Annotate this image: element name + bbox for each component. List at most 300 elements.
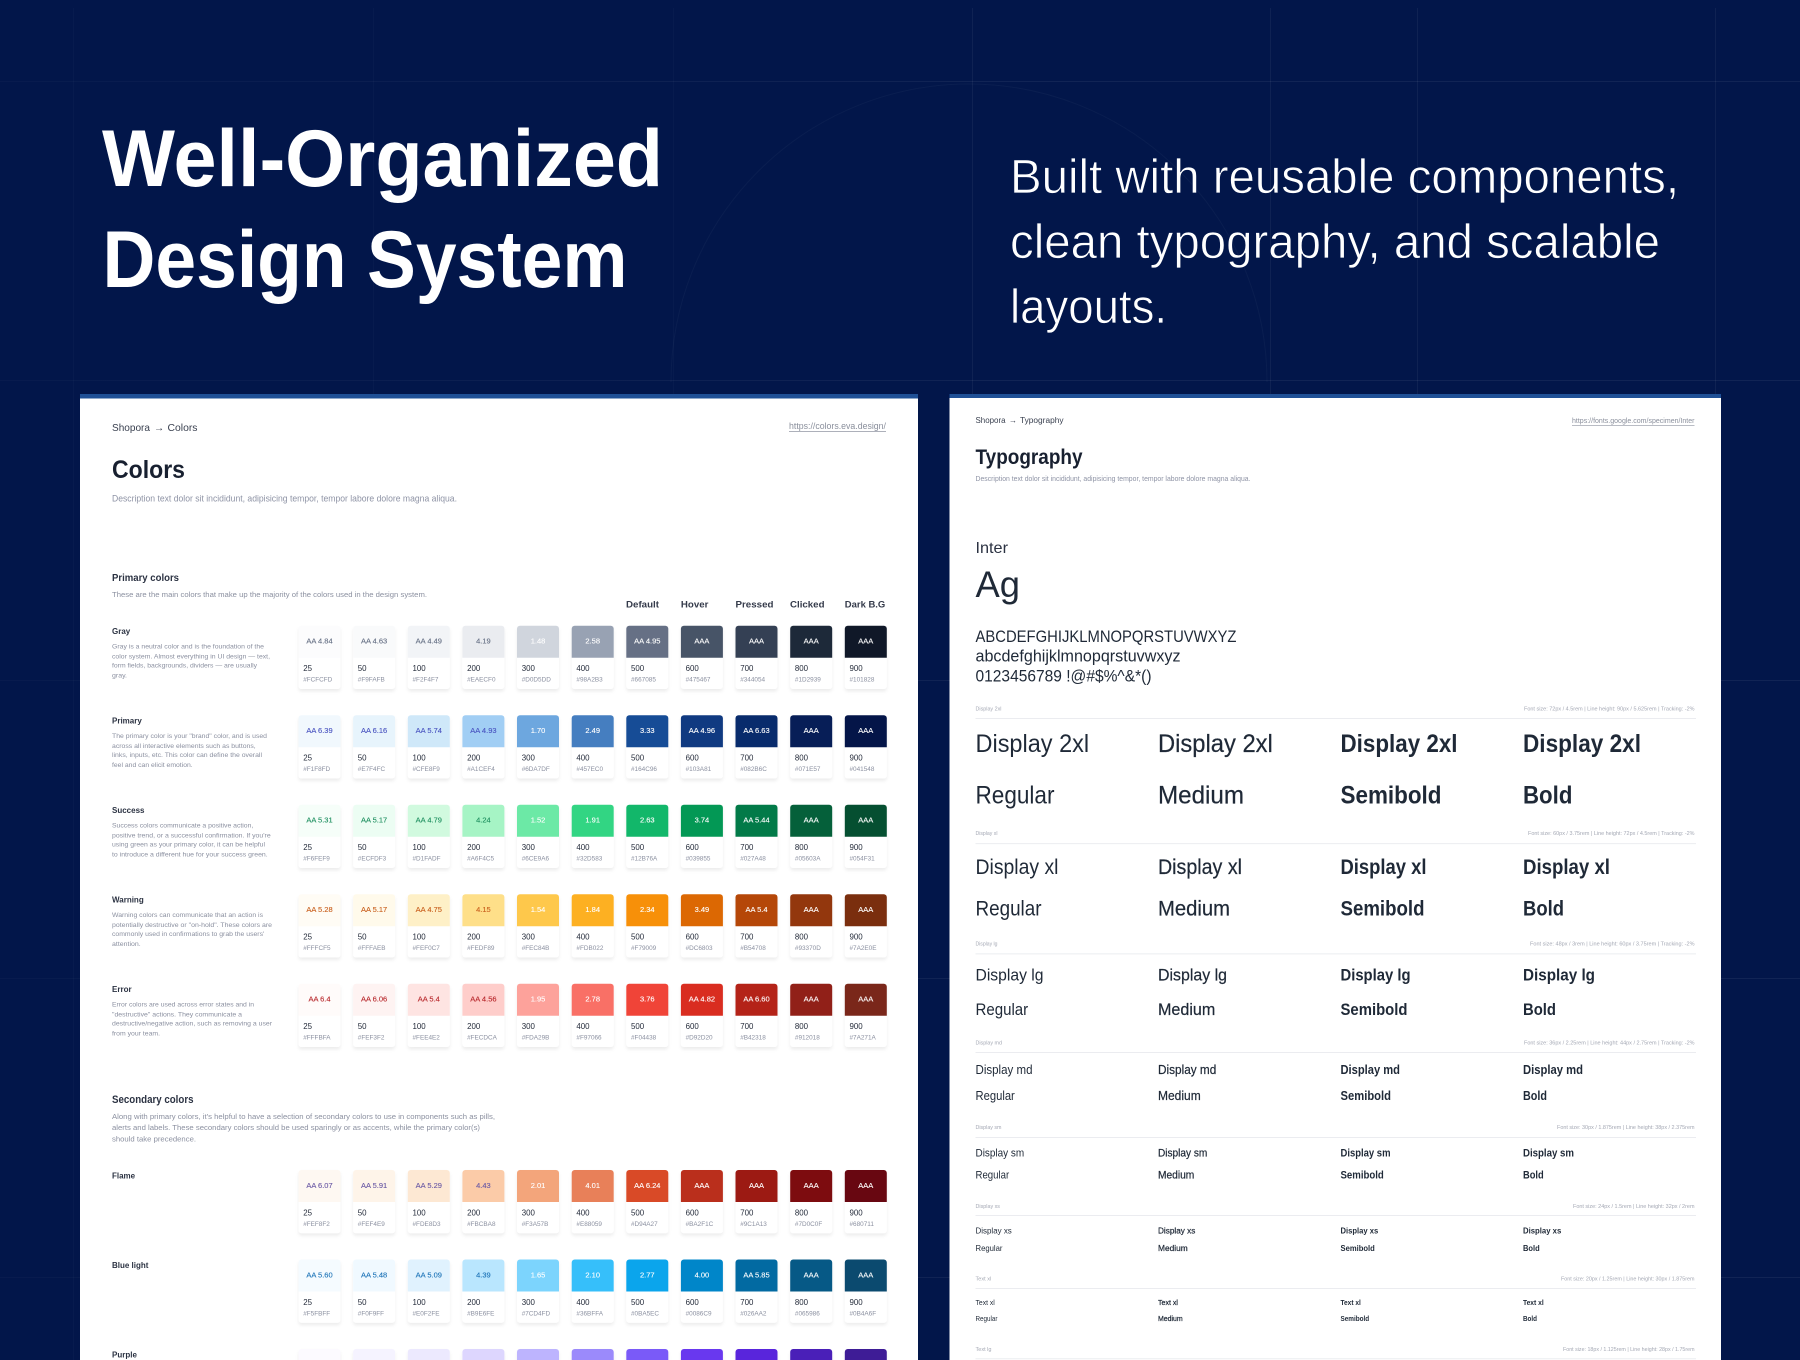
swatch: Blue light 500 [626, 1260, 668, 1323]
row label: color system. Almost everything in UI design — text, [112, 653, 270, 660]
swatch: Success 25: 25 [303, 843, 313, 852]
swatch: Flame 500: #D94A27 [631, 1221, 658, 1228]
swatch: Blue light 100 [408, 1260, 450, 1323]
section heading: secondary colors: Secondary colors [112, 1094, 194, 1106]
row caption [976, 707, 1696, 719]
swatch: Primary 50: #E7F4FC [358, 766, 386, 773]
swatch: Primary 300: 1.70 [531, 726, 545, 735]
type row: Text xl: Regular [976, 1314, 998, 1323]
row label: Success colors communicate a positive action, [112, 822, 253, 829]
swatch: Gray 200 [462, 626, 504, 689]
swatch: Flame 50: AA 5.91 [361, 1181, 387, 1190]
type row: Text xl: Semibold [1340, 1314, 1369, 1323]
row label: feel and can elicit emotion. [112, 762, 193, 769]
swatch: Error 500: 3.76 [640, 995, 655, 1004]
swatch: Success 600 [681, 805, 723, 868]
section description: should take precedence. [112, 1134, 196, 1144]
swatch: Warning 300 [517, 894, 559, 958]
type row: Display xl: Display xl [1523, 856, 1610, 879]
swatch: Gray 200: 4.19 [476, 637, 491, 646]
type row: Display md: Display md [1340, 1062, 1400, 1077]
type row: Display xs: Semibold [1340, 1243, 1375, 1253]
type row: Display 2xl: Bold [1523, 782, 1572, 810]
swatch: Blue light 800: 800 [795, 1298, 809, 1307]
type row: Text xl: Text xl [976, 1298, 995, 1307]
swatch: Primary 300: #6DA7DF [522, 766, 550, 773]
row label: Warning [112, 896, 144, 905]
type row: Display sm: Regular [976, 1170, 1010, 1182]
swatch: Success 900 [845, 805, 887, 868]
swatch: Error 600: 600 [686, 1022, 699, 1031]
swatch: Primary 500: 500 [631, 754, 645, 763]
section description: These are the main colors that make up the majority of the colors used in the design system. [112, 590, 427, 599]
panel background [80, 394, 918, 1360]
subtitle: Built with reusable components, [1010, 151, 1679, 204]
swatch: Primary 500: 3.33 [640, 726, 655, 735]
swatch: Gray 300: #D0D5DD [522, 677, 551, 684]
row label: "destructive" actions. They communicate a [112, 1011, 242, 1018]
swatch: Error 25: AA 6.4 [308, 995, 331, 1004]
type row: Display 2xl: Semibold [1340, 782, 1442, 810]
swatch: Warning 500 [626, 894, 668, 958]
swatch: Blue light 300 [517, 1260, 559, 1323]
swatch: Success 800 [790, 805, 832, 868]
breadcrumb: Colors [168, 423, 198, 434]
swatch: Gray 25: 25 [303, 664, 313, 673]
row label: form fields, backgrounds, dividers — are usually [112, 662, 258, 669]
glyph set: 0123456789 !@#$%^&*() [976, 668, 1152, 686]
column headers: Dark B.G [845, 600, 885, 611]
swatch: Blue light 400: 400 [576, 1298, 590, 1307]
breadcrumb: Typography [1020, 416, 1064, 425]
panel: typography [950, 394, 1721, 1360]
swatch: Gray 25: #FCFCFD [303, 677, 333, 684]
swatch: Gray 900: #101828 [849, 677, 875, 684]
title [102, 114, 663, 305]
column headers: Hover [681, 600, 709, 611]
swatch: Gray 100: #F2F4F7 [412, 677, 439, 684]
panel background [950, 394, 1721, 1360]
swatch: Blue light 300: 300 [522, 1298, 535, 1307]
swatch: Primary 700 [736, 715, 778, 778]
swatch: Primary 500: #164C96 [631, 766, 657, 773]
swatch: Primary 800: AAA [804, 726, 819, 735]
breadcrumb: Shopora [976, 416, 1006, 425]
color row: Purple [112, 1349, 887, 1360]
type row: Display md: Display md [1523, 1062, 1583, 1077]
swatch: Blue light 600: 4.00 [695, 1270, 709, 1280]
type row: Display xl: Display xl [1158, 856, 1242, 879]
swatch: Gray 600: #475467 [686, 677, 711, 684]
type row: Display xs: Display xs [1158, 1225, 1196, 1235]
swatch: Flame 100: AA 5.29 [416, 1181, 442, 1190]
swatch: Success 400: 400 [576, 843, 590, 852]
row label: The primary color is your "brand" color, and is used [112, 733, 267, 740]
swatch: Success 600: #039855 [686, 856, 711, 863]
type row: Display lg: Regular [976, 1000, 1028, 1019]
swatch: Warning 600: 3.49 [695, 905, 709, 914]
swatch: Warning 600: #DC6803 [686, 945, 713, 952]
swatch: Primary 800: 800 [795, 754, 809, 763]
type row: Display xs: Bold [1523, 1243, 1540, 1253]
swatch: Error 800: #912018 [795, 1035, 820, 1042]
swatch: Gray 400 [572, 626, 614, 689]
swatch: Flame 50: #FEF4E9 [358, 1221, 385, 1228]
swatch: Warning 600 [681, 894, 723, 958]
swatch: Flame 700: 700 [740, 1208, 754, 1217]
swatch: Gray 25: AA 4.84 [306, 637, 333, 646]
type row: Display xl: Semibold [1340, 898, 1424, 920]
row label: attention. [112, 941, 141, 948]
swatch: Gray 400: 400 [576, 664, 590, 673]
swatch: Error 100: 100 [412, 1022, 426, 1031]
swatch: Success 25: AA 5.31 [306, 816, 333, 825]
swatch: Flame 500: AA 6.24 [634, 1181, 660, 1190]
swatch: Gray 50: AA 4.63 [361, 637, 387, 646]
swatch: Purple 50 [353, 1349, 395, 1360]
type row: Display xs: Medium [1158, 1243, 1188, 1253]
row label: Blue light [112, 1261, 149, 1270]
swatch: Primary 300 [517, 715, 559, 778]
swatch: Flame 200: 200 [467, 1208, 481, 1217]
swatch: Purple 25 [298, 1349, 340, 1360]
swatch: Error 900: 900 [849, 1022, 863, 1031]
swatch: Warning 800: AAA [804, 905, 819, 914]
swatch: Primary 800: #071E57 [795, 766, 821, 773]
swatch: Gray 800: #1D2939 [795, 677, 821, 684]
swatch: Success 900: AAA [858, 816, 873, 825]
swatch: Primary 600: #103A81 [686, 766, 712, 773]
swatch: Gray 25 [298, 626, 340, 689]
title: Design System [102, 215, 628, 305]
row caption: Display 2xl [976, 707, 1002, 713]
swatch: Success 500: #12B76A [631, 856, 658, 863]
swatch: Primary 25: AA 6.39 [306, 726, 333, 735]
swatch: Flame 50: 50 [358, 1208, 367, 1217]
swatch: Primary 600: 600 [686, 754, 699, 763]
type row: Display 2xl [976, 707, 1696, 810]
swatch: Warning 800: #93370D [795, 945, 821, 952]
swatch: Flame 400: #E88059 [576, 1221, 602, 1228]
swatch: Error 50: AA 6.06 [361, 995, 387, 1004]
swatch: Success 400: 1.91 [585, 816, 600, 825]
type row: Display lg: Semibold [1340, 1000, 1408, 1019]
swatch: Flame 300: 300 [522, 1208, 535, 1217]
type row: Display lg: Display lg [1340, 966, 1410, 984]
swatch: Warning 500: 2.34 [640, 905, 655, 914]
swatch: Warning 50 [353, 894, 395, 958]
swatch: Success 300: 300 [522, 843, 535, 852]
swatch: Warning 100: 100 [412, 933, 426, 942]
swatch: Flame 800: #7D0C0F [795, 1221, 822, 1228]
swatch: Blue light 200: #B9E6FE [467, 1310, 494, 1318]
breadcrumb [112, 423, 198, 434]
swatch: Blue light 600: 600 [686, 1298, 699, 1307]
swatch: Blue light 300: 1.65 [531, 1270, 545, 1280]
type row: Text xl: Text xl [1158, 1298, 1178, 1307]
swatch: Error 100: AA 5.4 [418, 995, 440, 1004]
swatch: Blue light 600: #0086C9 [686, 1310, 712, 1318]
color row: Warning [112, 894, 887, 958]
row label: Flame [112, 1171, 136, 1180]
column headers [626, 600, 885, 611]
swatch: Blue light 800: AAA [804, 1270, 819, 1280]
swatch: Error 800: 800 [795, 1022, 809, 1031]
type row: Display lg: Display lg [1523, 966, 1595, 984]
swatch: Warning 200 [462, 894, 504, 958]
swatch: Error 100: #FEE4E2 [412, 1035, 440, 1042]
row caption: Font size: 72px / 4.5rem | Line height: 90px / 5.625rem | Tracking: -2% [1524, 707, 1695, 713]
row caption [976, 831, 1696, 844]
swatch: Warning 700: #B54708 [740, 945, 766, 952]
swatch: Primary 500 [626, 715, 668, 778]
swatch: Primary 100: 100 [412, 754, 426, 763]
swatch: Gray 800 [790, 626, 832, 689]
swatch: Error 400: 2.78 [585, 995, 600, 1004]
swatch: Primary 900 [845, 715, 887, 778]
swatch: Warning 700: 700 [740, 933, 754, 942]
swatch: Warning 400: 1.84 [585, 905, 600, 914]
swatch: Purple 200 [462, 1349, 504, 1360]
swatch: Success 900: 900 [849, 843, 863, 852]
swatch: Flame 600: #BA2F1C [686, 1221, 714, 1228]
type row: Display sm: Display sm [976, 1148, 1024, 1160]
swatch: Flame 200 [462, 1170, 504, 1233]
swatch: Primary 100: AA 5.74 [416, 726, 442, 735]
swatch: Error 25 [298, 984, 340, 1047]
row label: potentially destructive or "on-hold". These colors are [112, 922, 272, 929]
swatch: Warning 50: #FFFAEB [358, 945, 386, 952]
swatch: Success 100: 100 [412, 843, 426, 852]
type row: Display 2xl: Display 2xl [976, 730, 1089, 758]
swatch: Success 700: AA 5.44 [743, 816, 770, 825]
swatch: Gray 500: #667085 [631, 677, 656, 684]
row label: Error [112, 985, 132, 994]
swatch: Success 500: 2.63 [640, 816, 655, 825]
swatch: Blue light 700: #026AA2 [740, 1310, 767, 1318]
swatch: Flame 25: AA 6.07 [306, 1181, 333, 1190]
type row: Display 2xl: Display 2xl [1340, 730, 1458, 758]
swatch: Primary 900: 900 [849, 754, 863, 763]
type row: Text xl: Text xl [1340, 1298, 1361, 1307]
swatch: Gray 700 [736, 626, 778, 689]
swatch: Gray 50 [353, 626, 395, 689]
breadcrumb: → [154, 423, 164, 434]
row label: positive trend, or a successful confirmation. If you're [112, 832, 271, 839]
swatch: Warning 400 [572, 894, 614, 958]
swatch: Purple 900 [845, 1349, 887, 1360]
swatch: Warning 25: 25 [303, 933, 313, 942]
section description [112, 1112, 495, 1144]
swatch: Success 800: AAA [804, 816, 819, 825]
swatch: Warning 900: #7A2E0E [849, 945, 877, 952]
swatch: Blue light 900: #0B4A6F [849, 1310, 876, 1318]
type row: Display md: Medium [1158, 1088, 1201, 1103]
swatch: Primary 50: AA 6.16 [361, 726, 387, 735]
swatch: Error 600 [681, 984, 723, 1047]
type row: Text xl: Medium [1158, 1314, 1183, 1323]
link: https://fonts.google.com/specimen/Inter [1572, 416, 1695, 425]
swatch: Flame 25 [298, 1170, 340, 1233]
swatch: Success 800: 800 [795, 843, 809, 852]
swatch: Primary 300: 300 [522, 754, 535, 763]
swatch: Warning 200: 4.15 [476, 905, 491, 914]
swatch: Error 500: #F04438 [631, 1035, 657, 1042]
swatch: Success 700 [736, 805, 778, 868]
swatch: Flame 700 [736, 1170, 778, 1233]
swatch: Flame 300: #F3A57B [522, 1221, 548, 1228]
link: https://colors.eva.design/ [789, 421, 887, 431]
swatch: Gray 500: AA 4.95 [634, 637, 660, 646]
swatch: Warning 300: 300 [522, 933, 535, 942]
type row: Display xl [976, 831, 1696, 920]
swatch: Error 400: #F97066 [576, 1035, 602, 1042]
swatch: Error 800 [790, 984, 832, 1047]
type row: Text lg: Text lg [976, 1347, 992, 1353]
type row: Display sm: Display sm [1158, 1148, 1207, 1160]
type row: Display xl: Display xl [976, 856, 1058, 879]
swatch: Blue light 200: 4.39 [476, 1270, 491, 1280]
swatch: Primary 700: 700 [740, 754, 754, 763]
swatch: Gray 900: 900 [849, 664, 863, 673]
swatch: Success 25: #F6FEF9 [303, 856, 330, 863]
swatch: Success 800: #05603A [795, 856, 821, 863]
panel: colors [80, 394, 918, 1360]
swatch: Warning 400: #FDB022 [576, 945, 604, 952]
swatch: Warning 50: AA 5.17 [361, 905, 387, 914]
color row: Blue light [112, 1260, 887, 1323]
type row: Display 2xl: Regular [976, 782, 1054, 810]
swatch: Primary 200: AA 4.93 [470, 726, 497, 735]
section description: Along with primary colors, it's helpful to have a selection of secondary colors to use in components such as pills, [112, 1112, 495, 1121]
swatch: Gray 100 [408, 626, 450, 689]
row caption: Font size: 24px / 1.5rem | Line height: 32px / 2rem [1573, 1204, 1694, 1210]
type row: Display sm: Medium [1158, 1170, 1194, 1182]
row label: Success [112, 806, 145, 815]
swatch: Error 700: 700 [740, 1022, 754, 1031]
swatch: Primary 25 [298, 715, 340, 778]
heading: Colors: Colors [112, 456, 185, 484]
type row: Display 2xl: Display 2xl [1158, 730, 1273, 758]
swatch: Warning 900 [845, 894, 887, 958]
row caption [976, 1204, 1696, 1216]
swatch: Primary 400: 2.49 [585, 726, 600, 735]
swatch: Flame 400: 400 [576, 1208, 590, 1217]
swatch: Flame 900 [845, 1170, 887, 1233]
swatch: Error 300 [517, 984, 559, 1047]
swatch: Gray 50: #F9FAFB [358, 677, 385, 684]
swatch: Primary 200: #A1CEF4 [467, 766, 495, 773]
type row: Display md: Semibold [1340, 1088, 1391, 1103]
row label: Primary [112, 717, 142, 726]
row caption [976, 1041, 1696, 1053]
glyph set: ABCDEFGHIJKLMNOPQRSTUVWXYZ [976, 628, 1236, 646]
type row: Display lg: Display lg [1158, 966, 1227, 984]
column headers: Pressed [736, 600, 774, 611]
swatch: Gray 500 [626, 626, 668, 689]
swatch: Gray 600 [681, 626, 723, 689]
swatch: Success 100: #D1FADF [412, 856, 441, 863]
swatch: Purple 500 [626, 1349, 668, 1360]
type row: Display xl: Display xl [1340, 856, 1426, 879]
swatch: Purple 600 [681, 1349, 723, 1360]
swatch: Warning 25: AA 5.28 [306, 905, 333, 914]
swatch: Success 300: #6CE9A6 [522, 856, 550, 863]
swatch: Blue light 50: AA 5.48 [361, 1270, 387, 1280]
row caption: Font size: 60px / 3.75rem | Line height: 72px / 4.5rem | Tracking: -2% [1528, 831, 1695, 837]
type row: Display sm [976, 1125, 1696, 1182]
swatch: Blue light 900: 900 [849, 1298, 863, 1307]
row label: from your team. [112, 1030, 160, 1037]
swatch: Primary 200: 200 [467, 754, 481, 763]
swatch: Warning 400: 400 [576, 933, 590, 942]
swatch: Blue light 600 [681, 1260, 723, 1323]
type row: Display lg: Medium [1158, 1000, 1215, 1019]
row label [112, 627, 270, 679]
row label: across all interactive elements such as buttons, [112, 743, 256, 750]
swatch: Gray 800: AAA [804, 637, 819, 646]
swatch: Error 300: 300 [522, 1022, 535, 1031]
section heading: primary colors: Primary colors [112, 573, 179, 584]
swatch: Error 700: AA 6.60 [743, 995, 770, 1004]
font name: Inter [976, 540, 1009, 557]
swatch: Gray 700: AAA [749, 637, 764, 646]
subtitle: clean typography, and scalable [1010, 216, 1660, 269]
color row: Flame [112, 1170, 887, 1233]
swatch: Success 50: #ECFDF3 [358, 856, 387, 863]
swatch: Error 200 [462, 984, 504, 1047]
row label: Gray [112, 627, 131, 636]
swatch: Blue light 800 [790, 1260, 832, 1323]
swatch: Warning 800 [790, 894, 832, 958]
swatch: Success 900: #054F31 [849, 856, 875, 863]
swatch: Error 200: #FECDCA [467, 1035, 498, 1042]
row label: Gray is a neutral color and is the foundation of the [112, 643, 264, 650]
swatch: Warning 100 [408, 894, 450, 958]
swatch: Warning 800: 800 [795, 933, 809, 942]
swatch: Flame 200: 4.43 [476, 1181, 491, 1190]
swatch: Error 600: AA 4.82 [689, 995, 715, 1004]
type row: Display md [976, 1041, 1696, 1103]
title: Well-Organized [102, 114, 663, 204]
swatch: Warning 600: 600 [686, 933, 699, 942]
swatch: Primary 900: #041548 [849, 766, 875, 773]
swatch: Warning 200: 200 [467, 933, 481, 942]
swatch: Success 50 [353, 805, 395, 868]
row caption [976, 1125, 1696, 1138]
row label: gray. [112, 672, 127, 679]
swatch: Error 200: AA 4.56 [470, 995, 497, 1004]
type row: Text lg [976, 1347, 1696, 1359]
swatch: Blue light 50: #F0F9FF [358, 1310, 384, 1318]
row caption: Display md [976, 1041, 1002, 1047]
swatch: Error 50: #FEF3F2 [358, 1035, 385, 1042]
color row: Success [112, 805, 887, 868]
swatch: Success 300 [517, 805, 559, 868]
swatch: Primary 50: 50 [358, 754, 367, 763]
swatch: Gray 300: 300 [522, 664, 535, 673]
row caption: Display xs [976, 1204, 1000, 1210]
swatch: Gray 600: AAA [694, 637, 709, 646]
row caption [976, 942, 1696, 954]
swatch: Blue light 25: AA 5.60 [306, 1270, 333, 1280]
swatch: Warning 300: 1.54 [531, 905, 545, 914]
swatch: Blue light 100: AA 5.09 [416, 1270, 442, 1280]
swatch: Flame 300 [517, 1170, 559, 1233]
swatch: Flame 900: AAA [858, 1181, 873, 1190]
swatch: Warning 700: AA 5.4 [745, 905, 768, 914]
swatch: Error 900: #7A271A [849, 1035, 877, 1042]
